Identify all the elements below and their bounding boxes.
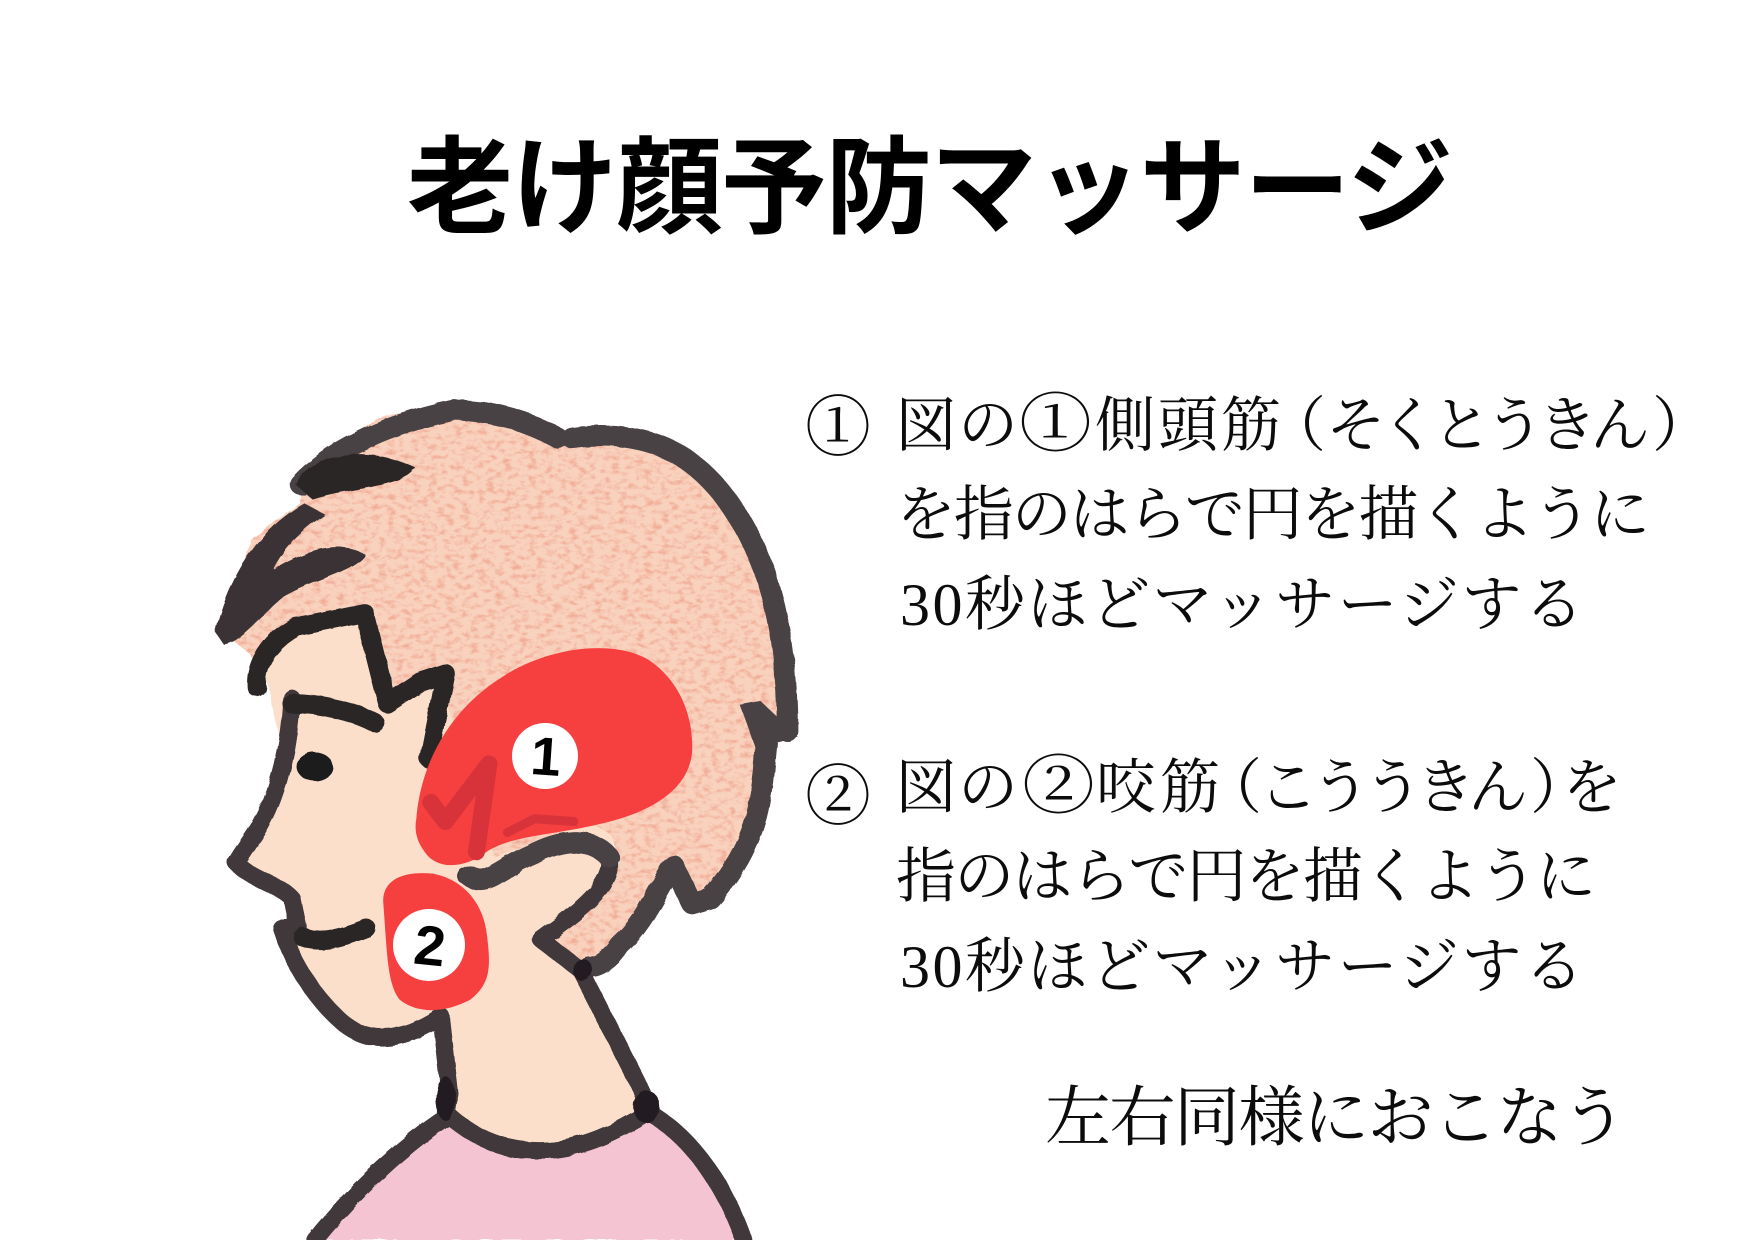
step 1 number: ① bbox=[805, 392, 871, 465]
step 1 text: ① bbox=[1019, 389, 1092, 460]
skin: face and neck bbox=[234, 605, 646, 1151]
hair fill bbox=[226, 402, 794, 975]
closing note: 左右同様におこなう bbox=[1045, 1082, 1627, 1155]
step 2 text: ） bbox=[1530, 755, 1590, 821]
step 1 text bbox=[896, 389, 1712, 638]
marker 1: 1 bbox=[529, 726, 563, 788]
title: 老け顔予防マッサージ bbox=[407, 130, 1453, 248]
muscle area 1: temporalis bbox=[416, 648, 692, 865]
step 2 number: ② bbox=[805, 761, 871, 834]
marker 2 bbox=[393, 909, 465, 981]
illustration: head in profile bbox=[215, 402, 798, 1240]
step 2 text: 咬筋 bbox=[1096, 755, 1220, 821]
step 2 text bbox=[896, 751, 1622, 1000]
outline: face bbox=[236, 698, 441, 1038]
top hair tuft bbox=[295, 454, 415, 500]
step 1 text: 30秒ほどマッサージする bbox=[900, 572, 1584, 638]
step 2 text: 指のはらで円を描くように bbox=[896, 844, 1596, 910]
muscle area 2: masseter bbox=[383, 873, 489, 1010]
outline: ear and neck bbox=[315, 840, 744, 1240]
step 1 text: ） bbox=[1652, 393, 1712, 459]
marker 2: 2 bbox=[411, 913, 449, 978]
neck joints bbox=[435, 959, 660, 1123]
step 1 text: を指のはらで円を描くように bbox=[896, 482, 1650, 548]
step 1 text: （ bbox=[1266, 393, 1326, 459]
forelock bbox=[215, 503, 365, 644]
outline: hair bbox=[300, 410, 787, 967]
step 2 text: ② bbox=[1022, 751, 1095, 822]
step 1 text: 図の bbox=[896, 393, 1018, 459]
marker 1 bbox=[512, 723, 578, 789]
eyebrow bbox=[292, 704, 375, 723]
eye bbox=[297, 752, 333, 781]
step 2 text: を bbox=[1562, 755, 1622, 821]
step 2 text: 図の bbox=[896, 755, 1018, 821]
step 2 text: （ bbox=[1202, 755, 1262, 821]
outline: bangs bbox=[257, 613, 445, 758]
step 1 text: 側頭筋 bbox=[1095, 393, 1281, 459]
ear shadow stroke bbox=[470, 842, 609, 880]
shirt bbox=[315, 1112, 745, 1240]
step 2 text: こううきん bbox=[1258, 755, 1528, 821]
mouth bbox=[302, 929, 367, 940]
step 2 text: 30秒ほどマッサージする bbox=[900, 934, 1584, 1000]
hair tail notch bbox=[740, 701, 798, 813]
step 1 text: そくとうきん bbox=[1326, 393, 1650, 459]
